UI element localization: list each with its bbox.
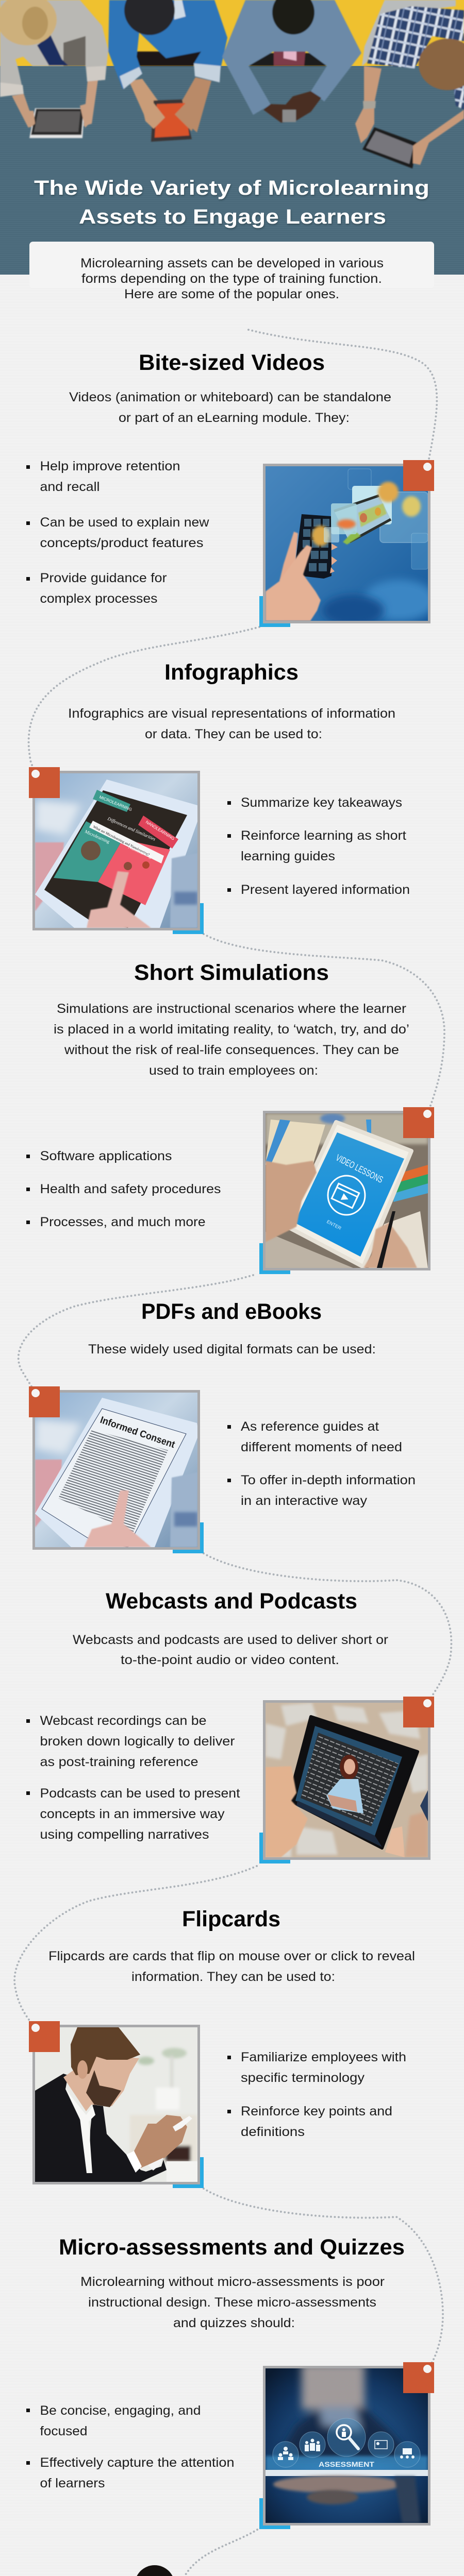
description: and quizzes should: [173,2316,295,2330]
bullet list: Processes, and much more [40,1215,205,1229]
bullet list: Effectively capture the attention [40,2455,234,2470]
bullet list: concepts/product features [40,536,203,550]
person 3 [222,0,361,123]
tablet 4 [362,110,464,168]
section: pdfs and ebooks [29,1299,416,1553]
bullet list: Webcast recordings can be [40,1714,206,1728]
description: instructional design. These micro-assessments [88,2295,376,2310]
description: to-the-point audio or video content. [121,1653,339,1667]
description: or part of an eLearning module. They: [119,411,350,425]
heading: Short Simulations [134,960,329,985]
section: webcasts and podcasts [26,1589,434,1863]
bullet list: Reinforce learning as short [241,828,406,843]
teal table [0,66,464,275]
bullet list [227,2050,406,2139]
title: The Wide Variety of Microlearning [34,177,429,199]
framed photo: assessment: ASSESSMENT [319,2460,374,2468]
person 1 [0,0,108,128]
bullet list: Reinforce key points and [241,2104,392,2119]
bullet list [227,795,410,897]
bullet list: learning guides [241,849,335,863]
bullet list: and recall [40,480,100,494]
bullet list: Familiarize employees with [241,2050,406,2064]
intro card [29,242,434,288]
framed photo: tablet infographic [29,767,204,934]
title [34,177,429,228]
description: is placed in a world imitating reality, to ‘watch, try, and do’ [54,1022,409,1037]
framed photo: video lessons tablet: ENTER [326,1219,342,1231]
description [48,1949,415,1984]
framed photo: tablet infographic: NANOLEARNING [145,820,175,841]
bullet list: Summarize key takeaways [241,795,402,810]
description: information. They can be used to: [131,1970,335,1984]
bullet list: Present layered information [241,883,410,897]
framed photo: tablet infographic: MICROLEARNING [98,795,132,812]
bullet list: focused [40,2424,88,2438]
description: These widely used digital formats can be used: [88,1342,376,1357]
description [69,390,391,425]
bullet list [227,1419,416,1508]
framed photo: informed consent tablet: Informed Consent [98,1415,177,1450]
heading: PDFs and eBooks [141,1299,322,1324]
bullet list: complex processes [40,591,158,606]
bullet list [26,1149,221,1229]
description: without the risk of real-life consequences. They can be [64,1043,399,1057]
framed photo: tablet infographic: Nanolearning [127,844,153,859]
framed photo: tablet infographic: What are Microlearning and Nanolearning? [92,825,150,857]
bullet list: Health and safety procedures [40,1182,221,1196]
person 4 [355,0,464,143]
bullet list: To offer in-depth information [241,1473,416,1487]
bullet list: broken down logically to deliver [40,1734,235,1749]
description: Webcasts and podcasts are used to deliver short or [73,1633,388,1647]
section: short simulations [26,960,434,1274]
section: bite-sized videos [26,350,436,627]
bullet list: Be concise, engaging, and [40,2403,201,2418]
description: Videos (animation or whiteboard) can be standalone [69,390,391,404]
person 3 [120,2565,195,2576]
header photo: four people with devices [0,0,464,168]
intro text [80,256,384,301]
description: Flipcards are cards that flip on mouse over or click to reveal [48,1949,415,1963]
bullet list: As reference guides at [241,1419,379,1434]
person 2 [108,0,227,132]
section: flipcards [29,1907,415,2188]
description [54,1002,409,1078]
intro text: Microlearning assets can be developed in various [80,256,384,270]
tablet 1 [27,103,92,138]
description: or data. They can be used to: [145,727,322,741]
bullet list: in an interactive way [241,1494,368,1508]
framed photo: video lessons tablet: VIDEO LESSONS [334,1153,385,1185]
framed photo: tablet infographic: Differences and Similarities [106,816,157,842]
description [68,706,395,741]
yellow wall [0,0,464,67]
heading: Bite-sized Videos [139,350,325,375]
bullet list [26,2403,234,2490]
section: micro-assessments and quizzes [26,2235,434,2529]
framed photo: man with phone [29,2021,204,2188]
bullet list: using compelling narratives [40,1827,209,1842]
header panel [0,0,464,301]
heading: Micro-assessments and Quizzes [59,2235,405,2260]
heading: Webcasts and Podcasts [106,1589,357,1614]
bullet list: different moments of need [241,1440,402,1454]
bullet list: concepts in an immersive way [40,1807,225,1821]
description [80,2275,385,2330]
bullet list [26,459,210,606]
tablet 2 [142,99,198,142]
bullet list [26,1714,240,1842]
framed photo: informed consent tablet [29,1386,204,1553]
footer photo: group of learners [10,2565,460,2576]
bullet list: specific terminology [241,2071,365,2085]
bullet list: as post-training reference [40,1755,198,1769]
bullet list: Podcasts can be used to present [40,1786,240,1801]
bullet list: Help improve retention [40,459,180,473]
bullet list: Provide guidance for [40,571,167,585]
framed photo: tablet infographic: Microlearning [84,829,111,844]
bullet list: of learners [40,2476,105,2490]
bullet list: Can be used to explain new [40,515,210,530]
intro text: Here are some of the popular ones. [124,287,339,301]
bullet list: definitions [241,2125,305,2139]
description: Simulations are instructional scenarios where the learner [57,1002,406,1016]
description [73,1633,388,1667]
heading: Flipcards [182,1907,280,1931]
framed photo: phone with video [259,460,436,627]
section: infographics [29,660,410,934]
intro text: forms depending on the type of training function. [81,272,382,286]
framed photo: assessment [259,2362,434,2529]
heading: Infographics [164,660,299,685]
description: Infographics are visual representations of information [68,706,395,721]
framed photo: webcast on tablet [259,1697,434,1863]
description: Microlearning without micro-assessments is poor [80,2275,385,2289]
framed photo: video lessons tablet [259,1107,434,1274]
description: used to train employees on: [149,1063,318,1078]
bullet list: Software applications [40,1149,172,1163]
title: Assets to Engage Learners [79,206,386,228]
